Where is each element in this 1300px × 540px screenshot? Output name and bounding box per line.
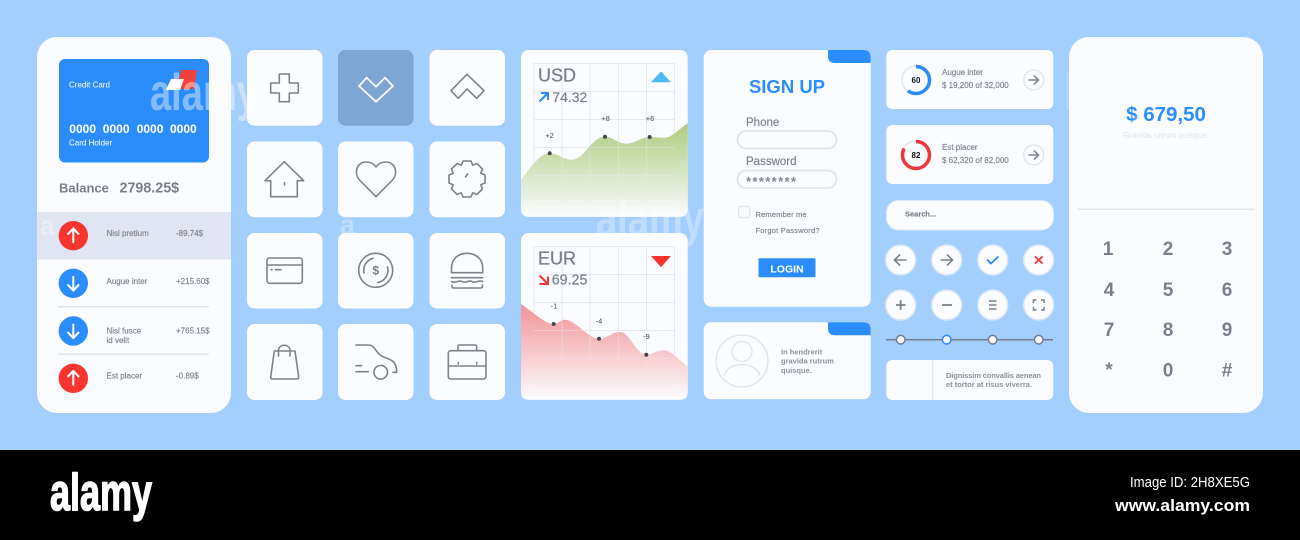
phone field	[738, 117, 836, 148]
login button: LOGIN	[770, 263, 804, 275]
heading USD: USD	[538, 66, 576, 86]
keypad digits: 4	[1104, 280, 1115, 301]
amount: $ 679,50	[1126, 103, 1206, 126]
stat card: Est placer	[886, 125, 1053, 184]
keypad digits: 9	[1222, 320, 1232, 341]
image id: Image ID: 2H8XE5G	[1130, 474, 1250, 491]
transaction row: id velit	[106, 336, 130, 345]
stat card: Est placer: $ 62,320 of 82,000	[942, 156, 1009, 165]
icon tile: briefcase	[430, 324, 505, 400]
keypad digits: *	[1105, 360, 1113, 381]
icon tile: car	[338, 324, 414, 400]
transaction row: +765.15$	[176, 326, 210, 336]
keypad digits: #	[1222, 360, 1233, 382]
data points: -4	[596, 316, 602, 326]
arrow up right	[540, 93, 548, 102]
password field: Password	[746, 156, 796, 168]
password field: ********	[746, 174, 797, 189]
remember me	[739, 206, 806, 219]
data points: +8	[601, 114, 610, 123]
transaction row: +215.60$	[176, 277, 210, 286]
stat card: Augue inter: Augue inter	[942, 68, 983, 77]
data points: -9	[643, 332, 650, 341]
heading EUR: EUR	[538, 249, 576, 269]
heading: SIGN UP	[749, 76, 825, 97]
avatar	[716, 335, 768, 387]
icon tile: chevron up	[430, 50, 505, 126]
keypad digits: 7	[1104, 320, 1114, 341]
profile text: quisque.	[781, 366, 812, 375]
data points	[551, 302, 650, 357]
panel: credit card and transactions	[37, 37, 231, 413]
keypad digits: 0	[1163, 360, 1173, 382]
icon tile: home	[247, 142, 322, 217]
area chart	[521, 304, 688, 400]
data points: -1	[551, 302, 557, 310]
icon tile: shopping bag	[247, 324, 322, 400]
icon tile: coin: $	[372, 264, 379, 278]
panel: keypad	[1069, 37, 1263, 413]
icon tile: plus	[247, 50, 322, 126]
arrow down right	[540, 276, 548, 284]
credit card: 0000	[137, 122, 164, 136]
icon tile: burger	[430, 233, 505, 308]
triangle up	[651, 72, 671, 82]
transaction row	[59, 269, 210, 298]
remember me: Remember me	[756, 210, 806, 219]
footer logo: alamy	[50, 464, 152, 522]
icon tile: card	[247, 233, 322, 308]
balance: 2798.25$	[120, 180, 179, 196]
button: menu	[978, 290, 1008, 320]
keypad digits: 2	[1163, 239, 1173, 260]
note card	[886, 360, 1053, 400]
icon grid	[247, 50, 505, 400]
data points: +6	[646, 114, 654, 123]
panel: profile	[704, 322, 871, 399]
stat card: Augue inter	[886, 50, 1053, 109]
balance	[59, 180, 179, 196]
watermarks: a	[340, 209, 355, 240]
stat card: Augue inter: $ 19,200 of 32,000	[942, 81, 1009, 90]
profile text: gravida rutrum	[781, 356, 834, 366]
watermarks: lamy	[1064, 64, 1154, 122]
transaction row: Est placer	[106, 372, 142, 380]
button: minus	[932, 290, 962, 320]
forgot password: Forgot Password?	[756, 226, 820, 235]
keypad digits: 1	[1103, 239, 1114, 260]
phone field: Phone	[746, 117, 779, 129]
login button	[758, 258, 816, 277]
stat card: Est placer: 82	[912, 151, 921, 160]
credit card: Credit Card	[69, 80, 110, 90]
button: plus	[886, 290, 916, 320]
keypad digits: 3	[1222, 239, 1232, 260]
transaction row	[59, 364, 199, 393]
transaction row	[59, 316, 210, 346]
button: close	[1024, 245, 1054, 275]
keypad digits	[1103, 239, 1233, 382]
EUR rate: 69.25	[552, 273, 588, 289]
amount caption: Gravida rutrum quisque.	[1123, 131, 1209, 140]
icon tile: coin	[338, 233, 414, 308]
keypad digits: 5	[1163, 280, 1174, 301]
profile text	[781, 348, 834, 375]
search field: Search...	[905, 210, 936, 218]
data points: +2	[545, 131, 554, 140]
footer band	[0, 450, 1300, 540]
panel: sign up form	[704, 50, 871, 307]
triangle down	[651, 256, 671, 267]
stat card: Augue inter: 60	[912, 76, 921, 85]
icon tile: gear	[430, 142, 505, 217]
transaction row: Nisl fusce	[106, 326, 142, 336]
highlighted transaction row: -89.74$	[176, 229, 204, 238]
button: forward	[932, 245, 962, 275]
balance: Balance	[59, 180, 109, 196]
note card: et tortor at risus viverra.	[946, 380, 1032, 389]
profile text: In hendrerit	[781, 348, 823, 356]
icon tile: heart	[338, 142, 414, 217]
credit card: 0000	[69, 122, 96, 136]
icon tile: chevron down active	[338, 50, 414, 126]
panel: USD chart	[521, 50, 688, 217]
button: back	[886, 245, 916, 275]
watermarks: a	[40, 210, 55, 241]
round buttons	[886, 245, 1054, 320]
stat card: Est placer: Est placer	[942, 143, 978, 152]
button: check	[978, 245, 1008, 275]
password field	[738, 156, 836, 189]
highlighted transaction row: Nisl pretium	[106, 229, 149, 238]
panel: EUR chart	[521, 233, 688, 400]
search field	[886, 200, 1054, 230]
highlighted transaction row	[37, 212, 231, 260]
USD rate: 74.32	[552, 89, 588, 105]
button: fullscreen	[1024, 290, 1054, 320]
transaction row: -0.89$	[176, 372, 199, 380]
website: www.alamy.com	[1114, 496, 1250, 515]
watermarks: alamy	[596, 190, 704, 248]
credit card: Card Holder	[69, 138, 112, 148]
keypad digits: 6	[1222, 280, 1232, 301]
keypad digits: 8	[1163, 320, 1173, 341]
credit card	[59, 59, 209, 162]
slider	[886, 335, 1053, 344]
watermarks	[40, 64, 1154, 248]
note card: Dignissim convallis aenean	[946, 371, 1041, 380]
credit card: 0000	[170, 122, 197, 136]
data points	[545, 114, 654, 155]
watermarks: alamy	[150, 64, 258, 122]
transaction row: Augue inter	[106, 277, 148, 286]
credit card: 0000	[103, 122, 130, 136]
area chart	[521, 123, 688, 217]
